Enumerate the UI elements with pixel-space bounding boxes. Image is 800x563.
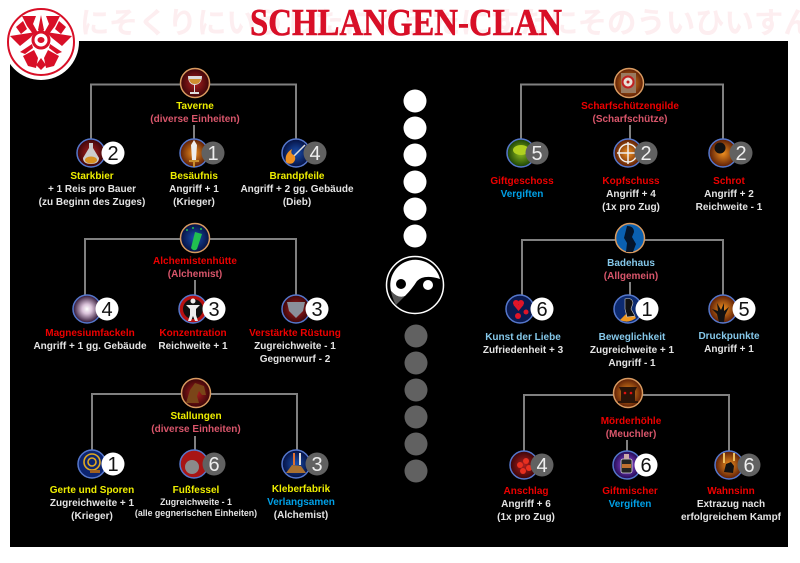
label: Starkbier: Starkbier [70, 171, 114, 182]
badge: 6: 6 [743, 455, 755, 477]
label: Kleberfabrik: Kleberfabrik [272, 484, 331, 495]
icon: Fußfessel [180, 450, 208, 478]
label: Kunst der Liebe [483, 332, 564, 356]
label: Kleberfabrik: Verlangsamen [267, 497, 335, 508]
icon: bathhouse silhouette [616, 224, 644, 252]
badge: 1 [102, 452, 124, 476]
label: Gerte und Sporen: Zugreichweite + 1 [50, 498, 135, 509]
icon: Brandpfeile [282, 139, 310, 167]
label: Starkbier: + 1 Reis pro Bauer [48, 184, 136, 195]
label: Brandpfeile: Angriff + 2 gg. Gebäude [240, 184, 354, 195]
badge: 3: 3 [311, 299, 323, 321]
badge: 4 [530, 454, 554, 477]
label: Verstärkte Rüstung: Verstärkte Rüstung [249, 328, 341, 339]
label: Fußfessel: (alle gegnerischen Einheiten) [135, 508, 257, 518]
label: Giftmischer: Giftmischer [602, 486, 658, 497]
label: Kleberfabrik [267, 484, 335, 521]
label: Starkbier: (zu Beginn des Zuges) [39, 197, 145, 208]
badge: 1: 1 [641, 299, 653, 321]
label: Wahnsinn [681, 486, 782, 523]
label: Beweglichkeit: Angriff - 1 [608, 358, 656, 369]
label: Kunst der Liebe: Kunst der Liebe [485, 332, 561, 343]
label: Beweglichkeit: Beweglichkeit [599, 332, 666, 343]
badge: 4 [304, 142, 326, 165]
icon: Verstärkte Rüstung [282, 295, 310, 323]
panel: Scharfschützengilde tree [490, 68, 763, 213]
badge: 6 [202, 452, 226, 476]
icon: Gerte und Sporen [78, 450, 106, 478]
badge: 3 [202, 298, 226, 321]
label: Anschlag: Anschlag [503, 486, 549, 497]
connector lines [91, 84, 296, 140]
clan emblem [3, 4, 79, 80]
label: Besäufnis: Angriff + 1 [169, 184, 219, 195]
heading: Stallungen: Stallungen [170, 411, 222, 422]
icon: Kleberfabrik [282, 450, 310, 478]
label: Kopfschuss [602, 176, 660, 213]
icon: Anschlag [510, 451, 538, 479]
subheading: (Meuchler) [606, 429, 656, 440]
label: Starkbier [39, 171, 145, 208]
badge: 6: 6 [536, 299, 548, 321]
label: Konzentration: Konzentration [159, 328, 227, 339]
icon: taverne goblet [180, 68, 210, 98]
badge: 1: 1 [207, 143, 219, 165]
icon: Schrot [709, 139, 737, 167]
heading: Alchemistenhütte: Alchemistenhütte [153, 256, 237, 267]
heading: Taverne: Taverne [176, 101, 214, 112]
label: Kleberfabrik: (Alchemist) [274, 510, 328, 521]
label: Schrot: Reichweite - 1 [696, 202, 763, 213]
badge: 4: 4 [309, 143, 321, 165]
label: Gerte und Sporen: (Krieger) [71, 511, 113, 522]
panel: Alchemistenhütte tree [33, 224, 341, 365]
subheading: (Alchemist) [168, 269, 222, 280]
badge: 6 [530, 298, 554, 321]
label: Besäufnis: (Krieger) [173, 197, 215, 208]
badge: 1 [202, 142, 224, 165]
label: Gerte und Sporen [50, 485, 135, 522]
panel: Stallungen tree [50, 378, 335, 522]
label: Schrot: Schrot [713, 176, 746, 187]
label: Druckpunkte: Angriff + 1 [704, 344, 754, 355]
label: Druckpunkte: Druckpunkte [698, 331, 760, 342]
badge: 5: 5 [531, 143, 543, 165]
badge: 2: 2 [735, 143, 747, 165]
icon: Kunst der Liebe [506, 295, 534, 323]
label: Anschlag: Angriff + 6 [501, 499, 551, 510]
label: Magnesiumfackeln: Angriff + 1 gg. Gebäude [33, 341, 147, 352]
label: Giftgeschoss [490, 176, 554, 200]
label: Anschlag [497, 486, 555, 523]
label: Wahnsinn: Extrazug nach [697, 499, 765, 510]
label: Verstärkte Rüstung: Zugreichweite - 1 [254, 341, 336, 352]
connector lines [524, 395, 729, 452]
label: Giftgeschoss: Vergiften [501, 189, 543, 200]
label: Giftgeschoss: Giftgeschoss [490, 176, 554, 187]
badge: 5 [526, 142, 548, 165]
subheading: (Scharfschütze) [592, 114, 668, 125]
badge: 5 [732, 298, 756, 321]
badge: 3 [306, 298, 328, 321]
heading: Scharfschützengilde: Scharfschützengilde [581, 101, 679, 112]
panel: Badehaus tree [483, 224, 760, 369]
label: Giftmischer: Vergiften [609, 499, 651, 510]
label: Beweglichkeit: Zugreichweite + 1 [590, 345, 675, 356]
label: Wahnsinn: Wahnsinn [707, 486, 755, 497]
icon: Druckpunkte [709, 295, 737, 323]
label: Brandpfeile: Brandpfeile [269, 171, 325, 182]
label: Verstärkte Rüstung [249, 328, 341, 365]
label: Konzentration: Reichweite + 1 [158, 341, 228, 352]
badge: 3 [306, 452, 328, 476]
icon: alchemist tube [180, 224, 210, 252]
badge: 3: 3 [311, 454, 323, 476]
panel: centre column dots and yin-yang [386, 90, 444, 482]
icon: Giftgeschoss [507, 139, 535, 167]
badge: 6 [634, 454, 658, 477]
label: Besäufnis [169, 171, 219, 208]
icon: yin-yang [386, 256, 444, 314]
icon: Magnesiumfackeln [73, 295, 101, 323]
badge: 2 [102, 142, 124, 165]
label: Konzentration [158, 328, 228, 352]
label: Kopfschuss: Kopfschuss [602, 176, 660, 187]
label: Besäufnis: Besäufnis [170, 171, 218, 182]
white level dots [404, 90, 426, 248]
icon: Besäufnis sword [180, 139, 208, 167]
badge: 4: 4 [101, 299, 113, 321]
badge: 4: 4 [536, 455, 548, 477]
label: Gerte und Sporen: Gerte und Sporen [50, 485, 134, 496]
icon: target [614, 68, 644, 98]
badge: 2: 2 [640, 143, 652, 165]
label: Brandpfeile [240, 171, 354, 208]
badge: 6 [738, 454, 760, 477]
icon: Beweglichkeit [614, 295, 642, 323]
icon: Konzentration [179, 295, 207, 323]
heading: Mörderhöhle: Mörderhöhle [601, 416, 662, 427]
subheading: (Allgemein) [604, 271, 658, 282]
panel: Mörderhöhle tree [497, 378, 782, 523]
grey level dots [404, 324, 428, 482]
decorative hiragana band: にそくりにいうしたにくうたにすたにそのういひいすん [80, 0, 800, 42]
label: Schrot [696, 176, 763, 213]
badge: 1: 1 [107, 454, 119, 476]
icon: Wahnsinn [715, 451, 743, 479]
subheading: (diverse Einheiten) [150, 114, 240, 125]
panel: Taverne tree [39, 68, 354, 208]
title: SCHLANGEN-CLAN [250, 2, 562, 44]
subheading: (diverse Einheiten) [151, 424, 241, 435]
label: Giftmischer [602, 486, 658, 510]
badge: 3: 3 [208, 299, 220, 321]
badge: 5: 5 [738, 299, 750, 321]
label: Magnesiumfackeln: Magnesiumfackeln [45, 328, 135, 339]
badge: 2 [730, 142, 752, 165]
badge: 6: 6 [208, 454, 220, 476]
badge: 4 [96, 298, 118, 321]
label: Fußfessel: Fußfessel [173, 485, 220, 496]
label: Brandpfeile: (Dieb) [283, 197, 311, 208]
icon: Giftmischer [613, 451, 641, 479]
label: Schrot: Angriff + 2 [704, 189, 754, 200]
connector lines [522, 240, 723, 296]
label: Magnesiumfackeln [33, 328, 147, 352]
label: Fußfessel [135, 485, 257, 518]
label: Verstärkte Rüstung: Gegnerwurf - 2 [260, 354, 331, 365]
label: Beweglichkeit [590, 332, 675, 369]
connector lines [92, 394, 297, 452]
label: Kopfschuss: Angriff + 4 [606, 189, 656, 200]
label: Wahnsinn: erfolgreichem Kampf [681, 512, 782, 523]
icon: Kopfschuss [614, 139, 642, 167]
connector lines [85, 239, 296, 296]
icon: horse [182, 378, 210, 408]
label: Anschlag: (1x pro Zug) [497, 512, 555, 523]
badge: 2 [634, 142, 658, 165]
label: Fußfessel: Zugreichweite - 1 [160, 497, 232, 507]
connector lines [521, 84, 723, 140]
label: Kopfschuss: (1x pro Zug) [602, 202, 660, 213]
badge: 2: 2 [107, 143, 119, 165]
icon: assassin den [614, 378, 642, 408]
badge: 1 [636, 298, 658, 321]
icon: Starkbier flask [77, 139, 105, 167]
label: Kunst der Liebe: Zufriedenheit + 3 [483, 345, 564, 356]
heading: Badehaus: Badehaus [607, 258, 655, 269]
label: Druckpunkte [698, 331, 760, 355]
badge: 6: 6 [640, 455, 652, 477]
